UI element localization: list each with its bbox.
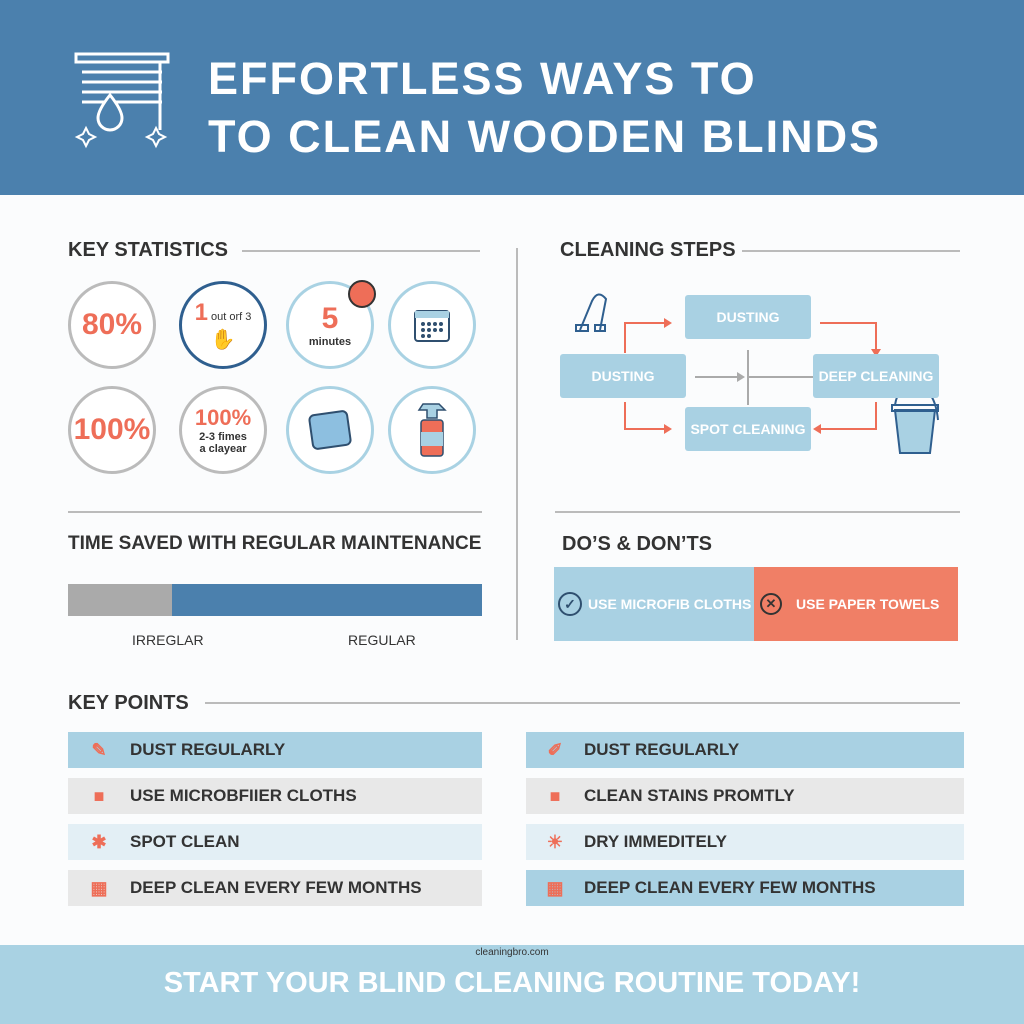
title [208, 53, 881, 162]
stat 5 minutes: 5 [322, 302, 338, 335]
bar chart: time saved: IRREGLAR [132, 632, 204, 648]
step: dusting left [560, 354, 686, 398]
heading: time saved: TIME SAVED WITH REGULAR MAINTENANCE [68, 533, 481, 554]
don't: USE PAPER TOWELS [796, 596, 939, 612]
panel: key points right: ■ [550, 786, 560, 806]
stat 1 out of 3: ✋ [211, 328, 235, 350]
stat 100% 2-3 times: a clayear [199, 443, 247, 455]
step: dusting top [685, 295, 811, 339]
header [0, 0, 1024, 195]
icon: spray bottle [388, 386, 476, 474]
stat 100% 2-3 times: 2-3 fimes [199, 431, 247, 443]
panel: key points right: ☀ [547, 832, 563, 852]
panel: key points right: ✐ [547, 740, 563, 760]
stat 5 minutes: minutes [309, 336, 351, 348]
title: TO CLEAN WOODEN BLINDS [208, 111, 881, 162]
panel: key points right: DUST REGULARLY [584, 740, 739, 759]
stat 100% [68, 386, 156, 474]
step: deep cleaning: DEEP CLEANING [819, 368, 933, 384]
icon: blinds [74, 52, 170, 148]
panel: key points right [526, 732, 964, 906]
step: dusting left: DUSTING [592, 368, 654, 384]
heading: key statistics: KEY STATISTICS [68, 239, 228, 261]
bar chart: time saved [68, 584, 482, 648]
icon: sponge [286, 386, 374, 474]
stat 5 minutes [286, 281, 374, 369]
stat 1 out of 3 [179, 281, 267, 369]
footer [0, 945, 1024, 1024]
stat 1 out of 3: 1 out orf 3 [195, 298, 251, 326]
don't: ✕ [766, 596, 776, 611]
panel: key points left [68, 732, 482, 906]
panel: key points left: DUST REGULARLY [130, 740, 285, 759]
stat 80% [68, 281, 156, 369]
arrows [625, 323, 876, 429]
panel: key points left: DEEP CLEAN EVERY FEW MONTHS [130, 878, 422, 897]
divider vertical [516, 248, 518, 640]
stat 100%: 100% [74, 413, 150, 446]
heading: do's and don'ts: DO’S & DON’TS [562, 533, 712, 555]
panel: key points left: ✱ [91, 832, 107, 852]
panel: key points right: CLEAN STAINS PROMTLY [584, 786, 795, 805]
panel: key points left: ■ [94, 786, 104, 806]
panel: key points left: SPOT CLEAN [130, 832, 240, 851]
stat 100% 2-3 times [179, 386, 267, 474]
do: ✓ [564, 596, 576, 612]
panel: key points right: DEEP CLEAN EVERY FEW MONTHS [584, 878, 876, 897]
heading: key points: KEY POINTS [68, 692, 189, 714]
icon: clock [348, 280, 376, 308]
panel: statistics circles [68, 280, 476, 474]
footer: cleaningbro.com [475, 947, 549, 958]
panel: key points left: USE MICROBFIIER CLOTHS [130, 786, 357, 805]
icon: calendar [388, 281, 476, 369]
step: spot cleaning: SPOT CLEANING [690, 421, 806, 437]
step: dusting top: DUSTING [716, 309, 780, 325]
step: deep cleaning [813, 354, 939, 398]
panel: key points left: ▦ [90, 878, 108, 898]
chart: cleaning steps flow [560, 294, 939, 454]
icon: vacuum [576, 294, 606, 331]
panel: key points left: ✎ [91, 740, 107, 760]
icon: bucket [892, 385, 938, 453]
bar chart: time saved: REGULAR [348, 632, 416, 648]
panel: key points right: ▦ [546, 878, 564, 898]
footer: START YOUR BLIND CLEANING ROUTINE TODAY! [164, 967, 860, 999]
title: EFFORTLESS WAYS TO [208, 53, 757, 104]
stat 100% 2-3 times: 100% [195, 405, 251, 430]
stat 80%: 80% [82, 308, 142, 341]
step: spot cleaning [685, 407, 811, 451]
heading: cleaning steps: CLEANING STEPS [560, 239, 736, 261]
panel: do's and don'ts [554, 567, 958, 641]
panel: key points right: DRY IMMEDITELY [584, 832, 727, 851]
do: USE MICROFIB CLOTHS [588, 596, 751, 612]
do [554, 567, 754, 641]
don't [754, 567, 958, 641]
